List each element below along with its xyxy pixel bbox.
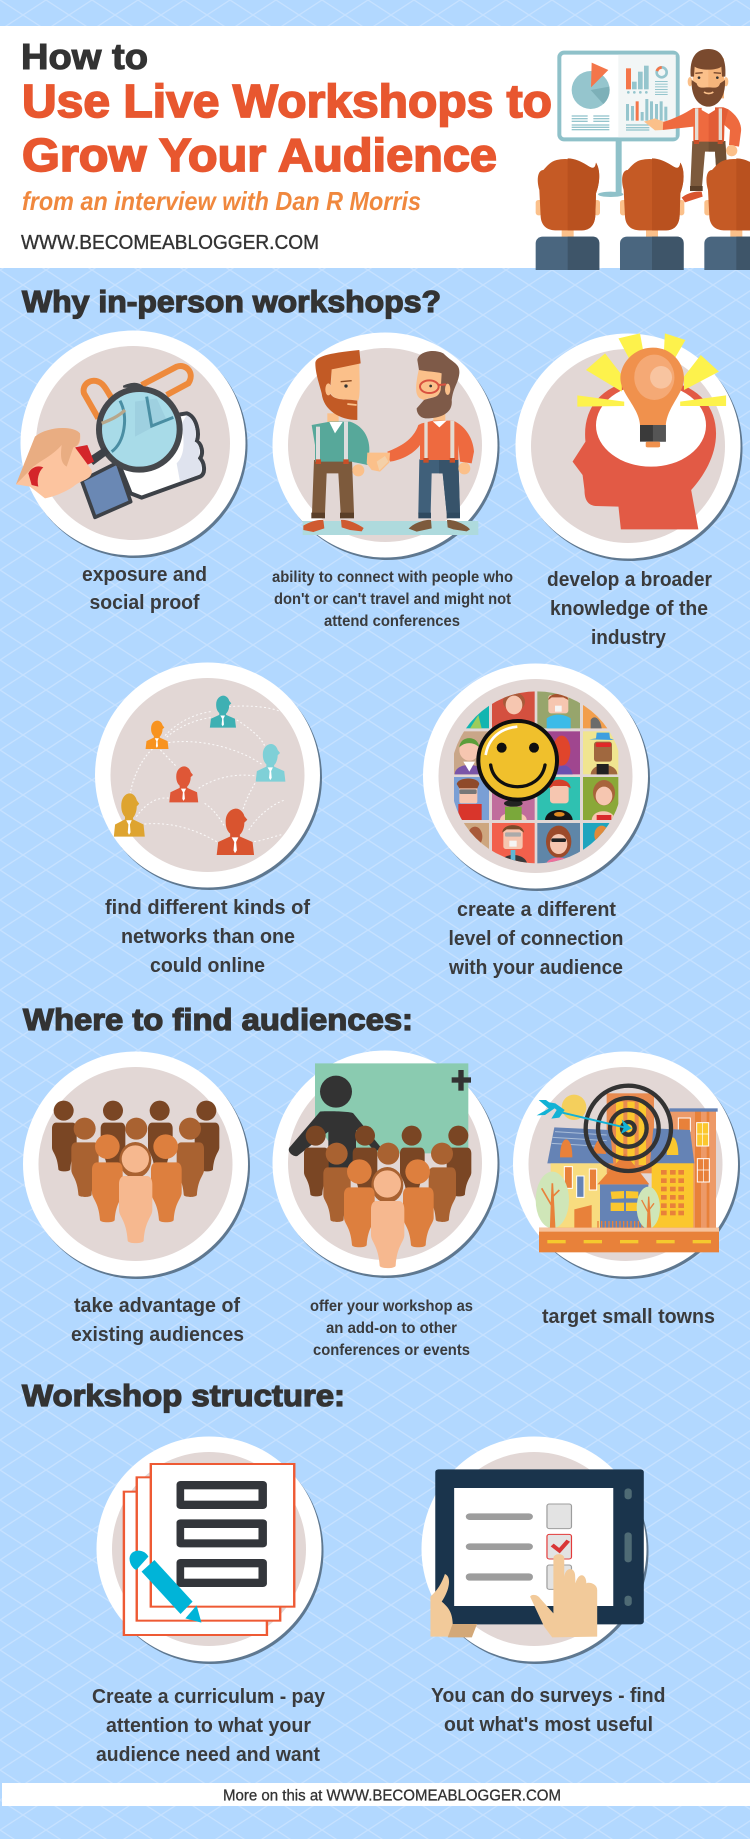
illustration: presenter and audience [536, 49, 750, 270]
label: connect: don't or can't travel and might not [274, 591, 512, 608]
panel: exposure and social proof [16, 330, 248, 558]
label: add-on: offer your workshop as [310, 1298, 473, 1315]
icon: town with target [536, 1086, 719, 1252]
label: curriculum: audience need and want [96, 1744, 320, 1766]
icon: crowd [52, 1101, 219, 1243]
label: surveys: out what's most useful [444, 1714, 653, 1736]
title: How to [21, 36, 148, 77]
label: knowledge [547, 569, 712, 649]
panel: surveys [422, 1436, 648, 1664]
panel: existing audiences [23, 1052, 250, 1279]
label: connection: level of connection [448, 928, 624, 950]
heading: why: Why in-person workshops? [22, 284, 441, 319]
panel: small towns [513, 1052, 740, 1279]
icon: people network [114, 696, 285, 855]
heading: structure: Workshop structure: [22, 1378, 345, 1413]
icon: tablet survey [430, 1469, 644, 1637]
audience member [704, 158, 750, 270]
label: knowledge: industry [591, 627, 667, 649]
label: surveys: You can do surveys - find [431, 1685, 666, 1707]
label: connection: with your audience [448, 957, 623, 979]
label: add-on: conferences or events [313, 1342, 470, 1359]
title: Use Live Workshops to [22, 75, 552, 127]
icon: handshake [303, 350, 478, 535]
header band [0, 26, 750, 270]
label: exposure: exposure and [82, 564, 207, 586]
label: surveys [431, 1685, 666, 1736]
label: exposure [82, 564, 207, 614]
label: existing audiences: existing audiences [71, 1324, 244, 1346]
label: connect: attend conferences [324, 613, 460, 630]
label: knowledge: knowledge of the [550, 598, 708, 620]
icon: documents and pencil [124, 1464, 294, 1635]
label: networks: find different kinds of [105, 897, 310, 919]
label: knowledge: develop a broader [547, 569, 712, 591]
label: networks: networks than one [121, 926, 295, 948]
label: curriculum [92, 1686, 326, 1766]
label: networks: could online [150, 955, 265, 977]
label: existing audiences: take advantage of [74, 1295, 240, 1317]
audience member [620, 158, 684, 270]
icon: magnifier over thumbs up [16, 366, 204, 517]
label: connect: ability to connect with people who [272, 569, 513, 586]
icon: head with light bulb [573, 333, 726, 529]
footer band [2, 1783, 750, 1806]
title: Grow Your Audience [22, 129, 497, 181]
panel: curriculum [96, 1436, 324, 1664]
panel: different networks [95, 662, 322, 890]
website: WWW.BECOMEABLOGGER.COM [21, 232, 319, 254]
label: exposure: social proof [90, 592, 200, 614]
footer text: More on this at WWW.BECOMEABLOGGER.COM [223, 1788, 561, 1804]
label: small towns: target small towns [542, 1306, 715, 1328]
panel: level of connection [423, 664, 650, 891]
heading: where: Where to find audiences: [23, 1002, 413, 1037]
label: connect [272, 569, 513, 630]
presenter [644, 49, 741, 202]
presentation board [559, 53, 678, 197]
label: curriculum: Create a curriculum - pay [92, 1686, 326, 1708]
label: add-on: an add-on to other [326, 1320, 457, 1337]
label: connection: create a different [457, 899, 616, 921]
subtitle: from an interview with Dan R Morris [22, 186, 421, 216]
icon: smiley over portraits [454, 691, 618, 865]
label: connection [448, 899, 624, 979]
title [21, 36, 552, 181]
panel: workshop add-on [272, 1050, 500, 1278]
audience member [536, 158, 600, 270]
label: add-on [310, 1298, 473, 1359]
panel: broader knowledge [516, 333, 742, 561]
panel: connect with people [272, 332, 500, 560]
label: existing audiences [71, 1295, 244, 1346]
icon: teacher and crowd [289, 1063, 471, 1268]
label: curriculum: attention to what your [106, 1715, 311, 1737]
label: networks [105, 897, 310, 977]
